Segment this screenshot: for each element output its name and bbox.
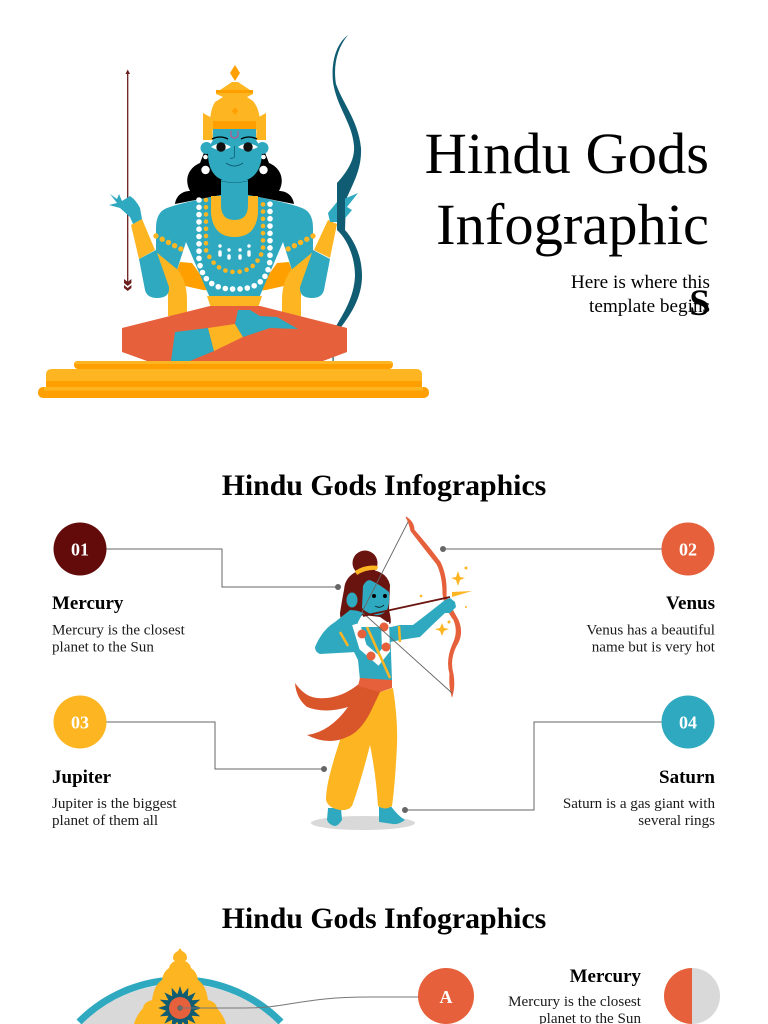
item 04: several rings bbox=[638, 813, 715, 829]
bow bbox=[406, 517, 461, 696]
item 01: Mercury is the closest bbox=[52, 622, 186, 638]
lap and legs bbox=[122, 306, 347, 361]
right thigh bbox=[282, 252, 313, 316]
title: Infographic bbox=[436, 192, 709, 257]
half pie bbox=[664, 968, 720, 1024]
item 01: Mercury bbox=[52, 593, 124, 614]
earrings bbox=[201, 155, 268, 174]
orange waist sash bbox=[176, 262, 293, 291]
item 04: 04 bbox=[679, 712, 697, 732]
illustration: seated god bbox=[38, 35, 429, 398]
heading: section 3: Hindu Gods Infographics bbox=[222, 902, 546, 935]
arrow bbox=[363, 591, 472, 616]
item 03 bbox=[52, 696, 177, 829]
heading: section 2: Hindu Gods Infographics bbox=[222, 469, 546, 502]
arrow bbox=[124, 70, 131, 291]
item 04: Saturn bbox=[659, 767, 715, 788]
left arm bbox=[109, 194, 169, 298]
subtitle: Here is where this bbox=[571, 272, 710, 293]
item 04 bbox=[563, 696, 715, 829]
trousers bbox=[326, 688, 397, 810]
hair bbox=[175, 150, 294, 204]
waist cloth bbox=[207, 296, 262, 308]
right arm bbox=[300, 183, 358, 298]
item 02: name but is very hot bbox=[592, 640, 716, 656]
crown bbox=[203, 65, 266, 140]
item 03: Jupiter is the biggest bbox=[52, 796, 177, 812]
feet bbox=[327, 805, 405, 826]
bow bbox=[333, 35, 362, 362]
dial ring bbox=[79, 980, 281, 1024]
hair bbox=[340, 550, 391, 626]
item 02: Venus has a beautiful bbox=[586, 622, 715, 638]
item 03: 03 bbox=[71, 712, 89, 732]
left thigh bbox=[156, 252, 187, 316]
shadow bbox=[311, 816, 415, 830]
illustration: temple dial bbox=[79, 948, 281, 1024]
sash bbox=[295, 678, 392, 741]
item 02: Venus bbox=[666, 593, 715, 614]
sunburst bbox=[158, 986, 202, 1024]
connector to A bbox=[180, 997, 420, 1008]
item 02 bbox=[586, 522, 716, 656]
subtitle: S bbox=[689, 283, 710, 324]
torso bbox=[156, 180, 313, 298]
garland bbox=[356, 622, 390, 678]
item 03: planet of them all bbox=[52, 813, 158, 829]
face bbox=[200, 129, 268, 182]
illustration: archer bbox=[295, 517, 472, 830]
armbands bbox=[340, 626, 400, 646]
subtitle: template begins bbox=[589, 296, 710, 317]
item 01 bbox=[52, 522, 186, 656]
item: Mercury bbox=[508, 966, 642, 1024]
item: Mercury: Mercury bbox=[570, 966, 641, 987]
badge A: A bbox=[440, 987, 452, 1007]
necklaces bbox=[156, 195, 313, 289]
item: Mercury: Mercury is the closest bbox=[508, 994, 642, 1010]
item 01: planet to the Sun bbox=[52, 640, 154, 656]
badge A bbox=[418, 968, 474, 1024]
temple tower bbox=[134, 948, 226, 1024]
torso bbox=[350, 627, 392, 680]
arms bbox=[315, 598, 456, 654]
title bbox=[425, 121, 709, 257]
item 02: 02 bbox=[679, 540, 697, 560]
bow string bbox=[362, 522, 452, 693]
item 04: Saturn is a gas giant with bbox=[563, 796, 715, 812]
head bbox=[346, 566, 389, 615]
connector lines bbox=[106, 546, 662, 813]
title: Hindu Gods bbox=[425, 121, 709, 186]
item 01: 01 bbox=[71, 540, 89, 560]
sparkles bbox=[420, 566, 468, 636]
stepped base bbox=[38, 361, 429, 398]
item 03: Jupiter bbox=[52, 767, 112, 788]
subtitle bbox=[571, 272, 710, 324]
